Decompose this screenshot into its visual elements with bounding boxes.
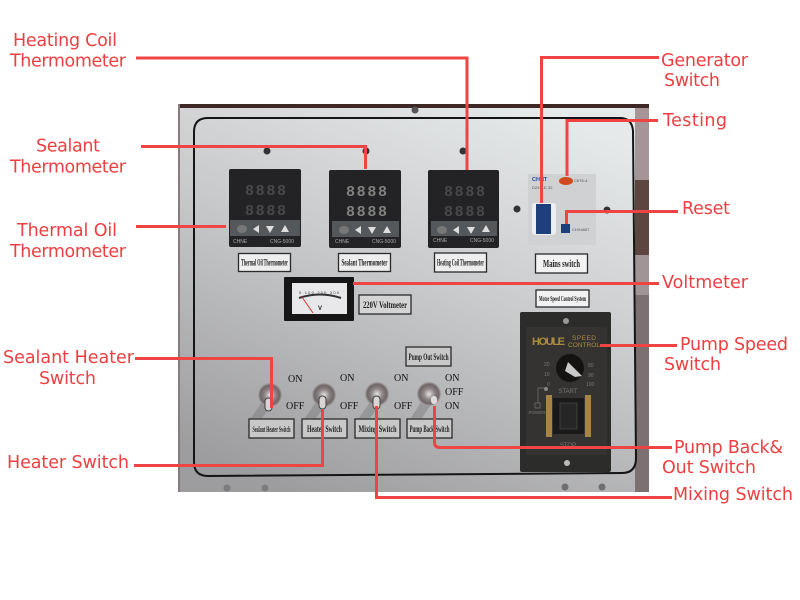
panel: control panel photo <box>178 104 649 492</box>
panel label: pump back switch: Pump Back Switch <box>410 424 450 434</box>
thermometer: heating coil: 8888 <box>444 184 485 201</box>
heading: pump back and out switch: Pump Back& <box>674 438 783 458</box>
arrow: voltmeter leader <box>353 282 659 285</box>
motor speed controller: 10 <box>544 372 550 378</box>
thermometer: sealant: 8888 <box>346 204 387 221</box>
arrow: sealant leader <box>141 146 366 169</box>
arrow: thermal oil leader <box>136 225 226 228</box>
breaker: mains switch: DZ47LE-32 <box>532 185 553 190</box>
switch position labels: ON <box>445 401 459 412</box>
switch position labels: OFF <box>340 401 359 412</box>
motor speed controller: HOULE <box>532 336 565 348</box>
thermometer: heating coil: 8888 <box>444 204 485 221</box>
thermometer: sealant: CHNE <box>335 239 350 245</box>
arrow: reset leader <box>566 212 678 224</box>
arrow: pump speed leader <box>600 344 677 347</box>
text: Heating Coil Thermometer <box>437 258 484 268</box>
arrow: testing leader <box>567 120 658 176</box>
thermometer: thermal oil <box>229 169 301 247</box>
panel label: pump out switch <box>406 347 451 366</box>
heading: heating coil thermometer: Thermometer <box>9 52 127 72</box>
switch position labels: ON <box>445 373 459 384</box>
heading: generator switch: Switch <box>664 71 720 91</box>
switch position labels: OFF <box>286 401 305 412</box>
panel label: 220V voltmeter: 220V Voltmeter <box>363 300 407 310</box>
breaker: mains switch <box>528 174 596 245</box>
panel label: heater switch: Heater Switch <box>307 424 342 434</box>
text: Thermal Oil Thermometer <box>241 258 288 268</box>
panel label: heater switch <box>302 419 347 438</box>
panel label: mixing switch <box>355 419 400 438</box>
heading: mixing switch: Mixing Switch <box>673 485 793 505</box>
thermometer: heating coil: CHNE <box>433 238 448 244</box>
panel label: sealant thermometer <box>338 254 390 272</box>
panel label: sealant thermometer: Sealant Thermometer <box>342 258 388 268</box>
motor speed controller: POWER <box>528 410 546 415</box>
switch position labels: ON <box>288 374 302 385</box>
motor speed controller: 0 <box>547 382 550 388</box>
panel label: pump out switch: Pump Out Switch <box>408 352 448 362</box>
motor speed controller: STOP <box>560 443 576 449</box>
heading: reset: Reset <box>682 199 730 219</box>
motor speed controller: CONTROL <box>568 342 600 349</box>
arrow: generator leader <box>542 58 659 203</box>
arrow: mixing leader <box>376 406 672 498</box>
panel label: pump back switch <box>407 419 452 438</box>
heading: sealant heater switch: Switch <box>39 369 96 389</box>
heading: pump back and out switch: Out Switch <box>662 458 756 478</box>
heading: heater switch: Heater Switch <box>7 453 129 473</box>
arrow: heating coil leader <box>136 58 467 170</box>
heading: testing: Testing <box>662 111 727 131</box>
toggle: mixing switch <box>359 382 389 418</box>
panel label: 220V voltmeter <box>359 295 411 314</box>
switch position labels: OFF <box>394 401 413 412</box>
thermometer: heating coil <box>428 170 499 248</box>
switch position labels: ON <box>340 373 354 384</box>
panel label: mains switch <box>536 254 588 273</box>
thermometer: sealant: CNG-5000 <box>372 239 396 245</box>
thermometer: thermal oil: CNG-5000 <box>270 239 294 245</box>
panel label: sealant heater switch <box>249 419 294 438</box>
panel label: heating coil thermometer <box>434 253 486 272</box>
heading: thermal oil thermometer: Thermometer <box>9 242 127 262</box>
motor speed controller: 100 <box>586 382 595 388</box>
panel label: motor speed control system <box>536 290 589 307</box>
thermometer: thermal oil: CHNE <box>233 239 248 245</box>
switch position labels: ON <box>394 373 408 384</box>
thermometer: thermal oil: 8888 <box>245 183 286 200</box>
motor speed controller <box>520 312 611 472</box>
heading: sealant heater switch: Sealant Heater <box>3 348 135 368</box>
heading: pump speed switch: Pump Speed <box>680 335 788 355</box>
breaker: mains switch: CHNT <box>532 177 548 183</box>
switch position labels: OFF <box>445 387 464 398</box>
motor speed controller: START <box>558 389 578 395</box>
thermometer: heating coil: CNG-5000 <box>470 238 494 244</box>
arrow: pump back leader <box>434 406 672 448</box>
heading: thermal oil thermometer: Thermal Oil <box>16 221 117 241</box>
heading: generator switch: Generator <box>661 51 749 71</box>
panel label: mains switch: Mains switch <box>543 259 580 270</box>
thermometer: thermal oil: 8888 <box>245 203 286 220</box>
toggle: pump back switch <box>411 382 441 418</box>
heading: sealant thermometer: Sealant <box>36 136 100 156</box>
arrow: sealant heater leader <box>135 358 272 408</box>
heading: pump speed switch: Switch <box>664 355 721 375</box>
motor speed controller: 20 <box>544 362 550 368</box>
toggle: sealant heater switch <box>251 383 282 418</box>
panel label: thermal oil thermometer <box>238 254 290 272</box>
motor speed controller: 80 <box>588 363 594 369</box>
motor speed controller: SPEED <box>572 335 596 342</box>
breaker: mains switch: CHX6887 <box>572 227 590 232</box>
panel label: motor speed control system: Motor Speed Control System <box>539 295 586 303</box>
voltmeter <box>284 277 354 321</box>
motor speed controller: 90 <box>588 373 594 379</box>
heading: heating coil thermometer: Heating Coil <box>13 31 117 51</box>
switch position labels <box>286 373 464 412</box>
thermometer: sealant <box>329 170 401 248</box>
thermometer: sealant: 8888 <box>346 184 387 201</box>
panel label: sealant heater switch: Sealant Heater Switch <box>252 425 291 434</box>
heading: voltmeter: Voltmeter <box>662 273 749 293</box>
arrow: heater leader <box>134 409 322 466</box>
heading: sealant thermometer: Thermometer <box>9 158 127 178</box>
breaker: mains switch: C6T6-4 <box>574 178 588 183</box>
panel label: mixing switch: Mixing Switch <box>358 424 396 434</box>
voltmeter: 0 100 200 300 <box>299 290 340 295</box>
toggle: heater switch <box>305 383 336 418</box>
voltmeter: V <box>318 306 322 312</box>
